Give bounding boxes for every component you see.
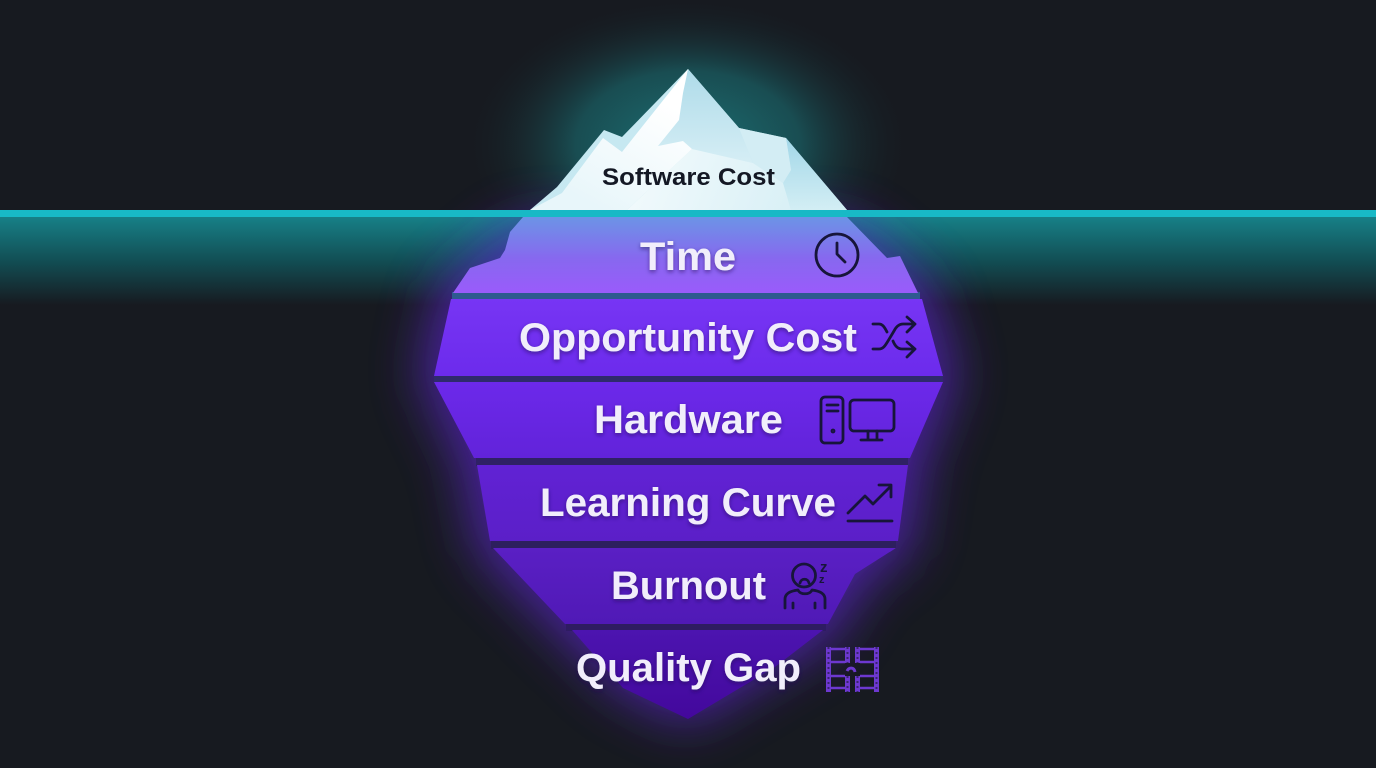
- mid right facet: [739, 128, 791, 183]
- iceberg tip: [530, 69, 847, 210]
- layer: Time: [453, 217, 918, 293]
- text: Burnout: Burnout: [611, 564, 766, 608]
- lower snow field: [627, 149, 791, 210]
- icon: broken film strip: [828, 647, 876, 692]
- layer: Opportunity Cost: [434, 299, 943, 376]
- water gradient below the waterline: [0, 217, 1376, 305]
- text: Hardware: Hardware: [594, 398, 783, 442]
- icon: tired person: z: [820, 559, 828, 576]
- outer right facet: [783, 138, 847, 210]
- gaps between layers: [434, 292, 943, 631]
- left white facet: [530, 69, 692, 210]
- icon: desktop computer: [821, 397, 894, 443]
- teal glow around iceberg tip: [463, 0, 913, 293]
- layer: Hardware: [434, 382, 943, 458]
- waterline: [0, 210, 1376, 217]
- central blue facet: [658, 69, 753, 163]
- text: Learning Curve: Learning Curve: [540, 481, 836, 525]
- label: Software Cost: Software Cost: [602, 164, 775, 191]
- purple glow around submerged iceberg: [434, 235, 943, 710]
- icon: shuffle arrows: [873, 317, 915, 357]
- icon: rising chart: [848, 485, 892, 521]
- text: Time: Time: [640, 235, 736, 279]
- text: Opportunity Cost: Opportunity Cost: [519, 316, 857, 360]
- text: Quality Gap: Quality Gap: [576, 646, 801, 690]
- layer: Quality Gap: [572, 630, 876, 719]
- ice silhouette and left rim: [530, 69, 847, 210]
- layer: Burnout: [493, 548, 896, 624]
- icon: tired person: z: [819, 574, 825, 586]
- layer: Learning Curve: [477, 465, 908, 541]
- icon: tired person: [785, 559, 828, 608]
- icon: clock: [816, 234, 858, 276]
